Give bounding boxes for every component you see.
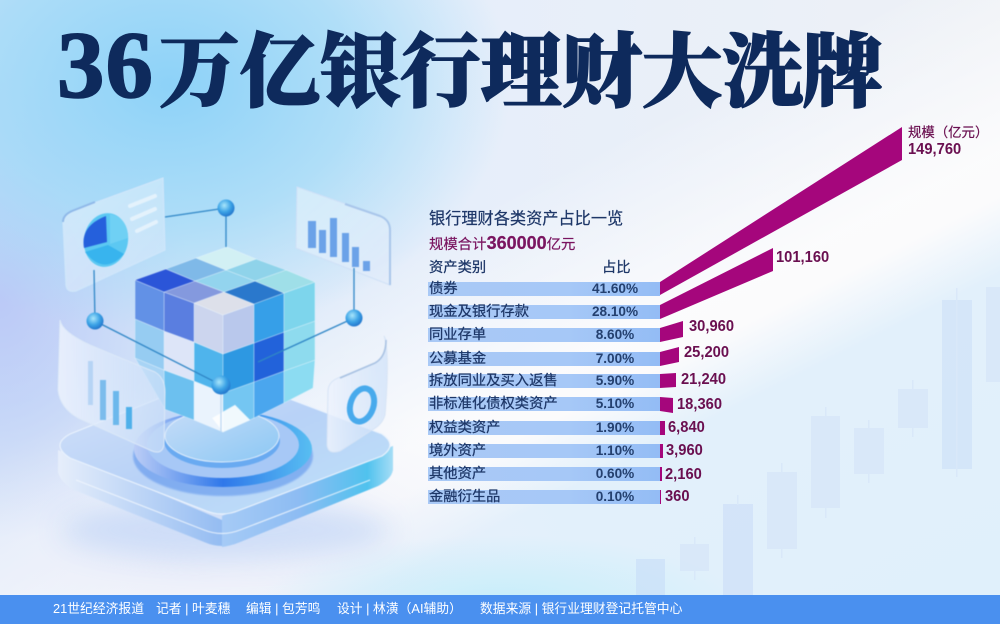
footer bar xyxy=(0,595,1000,624)
row: non-standard debt: 非标准化债权类资产 xyxy=(429,396,558,412)
footer credits: 设计 | 林潢（AI辅助） xyxy=(337,601,462,616)
row: cash: 28.10% xyxy=(592,304,638,319)
value labels: 25,200 xyxy=(684,344,729,361)
row: equity: 权益类资产 xyxy=(429,420,500,436)
footer credits: 记者 | 叶麦穗 xyxy=(156,601,230,616)
row: interbank lending xyxy=(428,374,660,388)
column header: category: 资产类别 xyxy=(429,260,486,276)
row: derivatives: 金融衍生品 xyxy=(429,489,500,505)
row: mutual funds: 公募基金 xyxy=(429,351,486,367)
row: other: 其他资产 xyxy=(429,466,486,482)
value labels: 3,960 xyxy=(666,442,703,459)
rubik cube xyxy=(135,247,315,432)
row: interbank lending: 拆放同业及买入返售 xyxy=(429,373,558,389)
row: bonds: 41.60% xyxy=(592,281,638,296)
row: interbank lending: 5.90% xyxy=(596,373,634,388)
row: cash xyxy=(428,305,660,319)
bottom layer xyxy=(194,381,223,432)
value labels: 6,840 xyxy=(668,419,705,436)
title: 万亿银行理财大洗牌 xyxy=(159,8,884,124)
footer credits: 数据来源 | 银行业理财登记托管中心 xyxy=(480,601,682,616)
row: mutual funds xyxy=(428,352,660,366)
axis label: scale: 规模（亿元） xyxy=(908,125,988,140)
value labels: 149,760 xyxy=(908,141,961,158)
row: overseas: 1.10% xyxy=(596,443,634,458)
glass panel with pie chart xyxy=(63,178,165,291)
middle layer xyxy=(194,342,223,393)
footer credits: 编辑 | 包芳鸣 xyxy=(246,601,320,616)
row: overseas xyxy=(428,444,660,458)
platform xyxy=(58,377,393,560)
row: cash: 现金及银行存款 xyxy=(429,304,529,320)
row: bonds: 债券 xyxy=(429,281,458,297)
top layer sides xyxy=(194,303,223,354)
network nodes xyxy=(86,200,362,394)
row: non-standard debt: 5.10% xyxy=(596,396,634,411)
value labels: 360 xyxy=(665,488,690,505)
title: 36 xyxy=(57,12,154,118)
row: bonds xyxy=(428,282,660,296)
curved glass panel with ring xyxy=(327,336,387,452)
row: interbank CDs: 同业存单 xyxy=(429,327,486,343)
row: equity xyxy=(428,421,660,435)
glass panel with bar chart xyxy=(296,187,390,285)
pie chart icon xyxy=(80,210,132,270)
circular pedestal xyxy=(133,410,313,496)
column header: share: 占比 xyxy=(602,260,631,276)
row: interbank CDs xyxy=(428,328,660,342)
row: derivatives xyxy=(428,490,660,504)
value labels: 101,160 xyxy=(776,249,829,266)
row: overseas: 境外资产 xyxy=(429,443,486,459)
row: derivatives: 0.10% xyxy=(596,489,634,504)
value labels: 18,360 xyxy=(677,396,722,413)
footer credits: 21世纪经济报道 xyxy=(53,601,144,616)
row: mutual funds: 7.00% xyxy=(596,351,634,366)
row: non-standard debt xyxy=(428,397,660,411)
total scale: 规模合计360000亿元 xyxy=(429,233,575,253)
connector lines xyxy=(94,208,354,432)
row: interbank CDs: 8.60% xyxy=(596,327,634,342)
row: equity: 1.90% xyxy=(596,420,634,435)
table heading: 银行理财各类资产占比一览 xyxy=(429,210,623,228)
row: other xyxy=(428,467,660,481)
row: other: 0.60% xyxy=(596,466,634,481)
curved glass panel with bars xyxy=(58,320,165,452)
top faces xyxy=(194,292,254,315)
value labels: 21,240 xyxy=(681,371,726,388)
value labels: 2,160 xyxy=(665,466,702,483)
value labels: 30,960 xyxy=(689,318,734,335)
footer credits xyxy=(53,601,682,616)
